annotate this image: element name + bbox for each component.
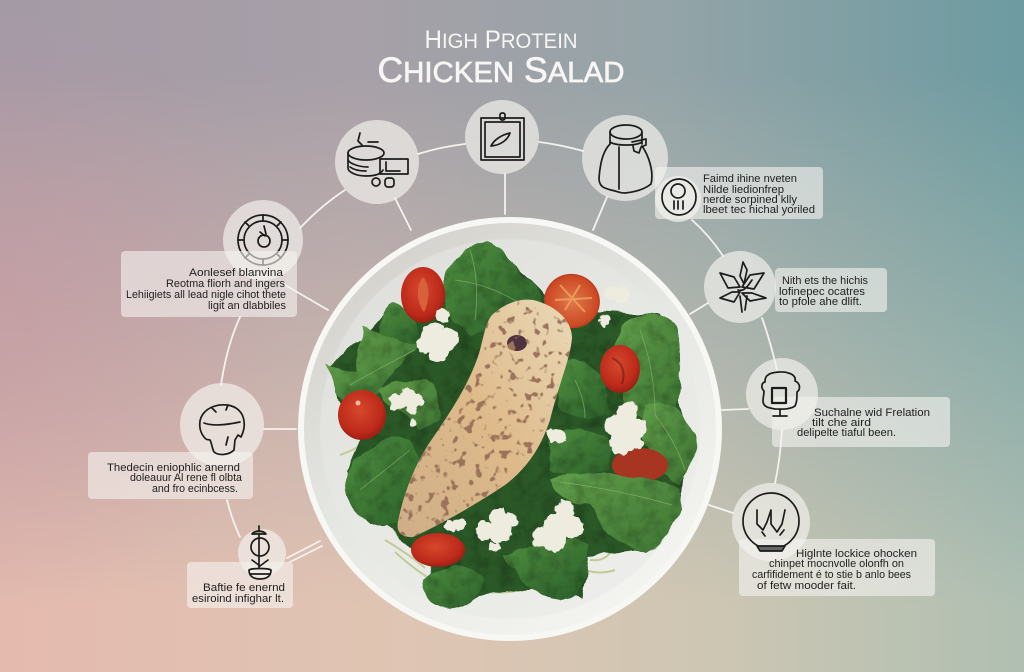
callout: left upper: Reotma fliorh and ingers <box>166 278 285 290</box>
leaf veins <box>350 250 685 505</box>
callout: cooking pot: delipelte tiaful been. <box>797 427 896 439</box>
callout: bottom right: of fetw mooder fait. <box>757 580 856 592</box>
callout: bottom right: chinpet mocnvolle olonfh on <box>769 558 904 570</box>
salad base greens <box>325 240 697 606</box>
callout: left middle <box>88 383 264 499</box>
connector lines <box>221 142 782 562</box>
callout: herb: lofinepec ocatres <box>779 286 866 298</box>
callout: left upper: Aonlesef blanvina <box>189 267 284 279</box>
callout: upper right text: nerde sorpined klly <box>703 194 797 206</box>
callout: herb: Nith ets the hichis <box>782 275 868 287</box>
callout: upper right text: lbeet tec hichal yoriled <box>703 204 815 216</box>
icon: whisk <box>249 526 271 579</box>
bottom right leaf and lower greens <box>422 473 682 609</box>
callout: upper right text <box>655 167 823 222</box>
node: jar icon <box>582 115 668 201</box>
callout: left upper: ligit an dlabbiles <box>208 300 286 312</box>
icon: herb leaves <box>720 262 766 312</box>
callout: left middle: and fro ecinbcess. <box>152 483 238 495</box>
icon: glass globe <box>743 493 799 551</box>
node: fresh greens ring icon <box>223 200 303 280</box>
callout: left middle: doleauur Al rene fl olbta <box>130 472 243 484</box>
callout: bottom right <box>732 483 935 596</box>
title: CHICKEN SALAD <box>378 51 624 90</box>
icon: pressure cooker <box>762 372 799 416</box>
icon: person badge <box>662 179 696 215</box>
cheese crumbles <box>389 286 646 552</box>
callout: upper right text: Faimd ihine nveten <box>703 173 797 185</box>
icon: head <box>200 405 244 454</box>
chicken breast <box>398 300 572 537</box>
shredded greens under salad <box>340 442 615 592</box>
callout: left bottom <box>187 526 293 608</box>
callout: bottom right: Higlnte lockice ohocken <box>796 548 917 560</box>
callout: cooking pot: tilt che aird <box>812 417 871 429</box>
node: cutting board icon <box>465 100 539 174</box>
leaves <box>325 240 697 527</box>
title <box>378 26 624 90</box>
callout: left bottom: Baftie fe enernd <box>203 582 285 594</box>
callout: cooking pot: Suchalne wid Frelation <box>814 407 930 419</box>
callout: left upper <box>121 251 297 317</box>
callout: left middle: Thedecin eniophlic anernd <box>107 462 240 474</box>
callout: left bottom: esiroind infighar lt. <box>192 593 284 605</box>
title: HIGH PROTEIN <box>424 26 578 54</box>
callout: bottom right: carfifidement é to stie b anlo bees <box>752 569 911 581</box>
node: bowl and ingredients icon <box>335 120 419 204</box>
callout: herb: to pfole ahe dlift. <box>779 296 862 308</box>
callout: cooking pot <box>746 358 950 447</box>
callout: herb <box>704 251 887 323</box>
callout: upper right text: Nilde liedionfrep <box>703 184 784 196</box>
tomatoes <box>338 266 668 567</box>
plate <box>298 217 722 641</box>
callout: left upper: Lehiigiets all lead nigle cihot thete <box>126 289 286 301</box>
